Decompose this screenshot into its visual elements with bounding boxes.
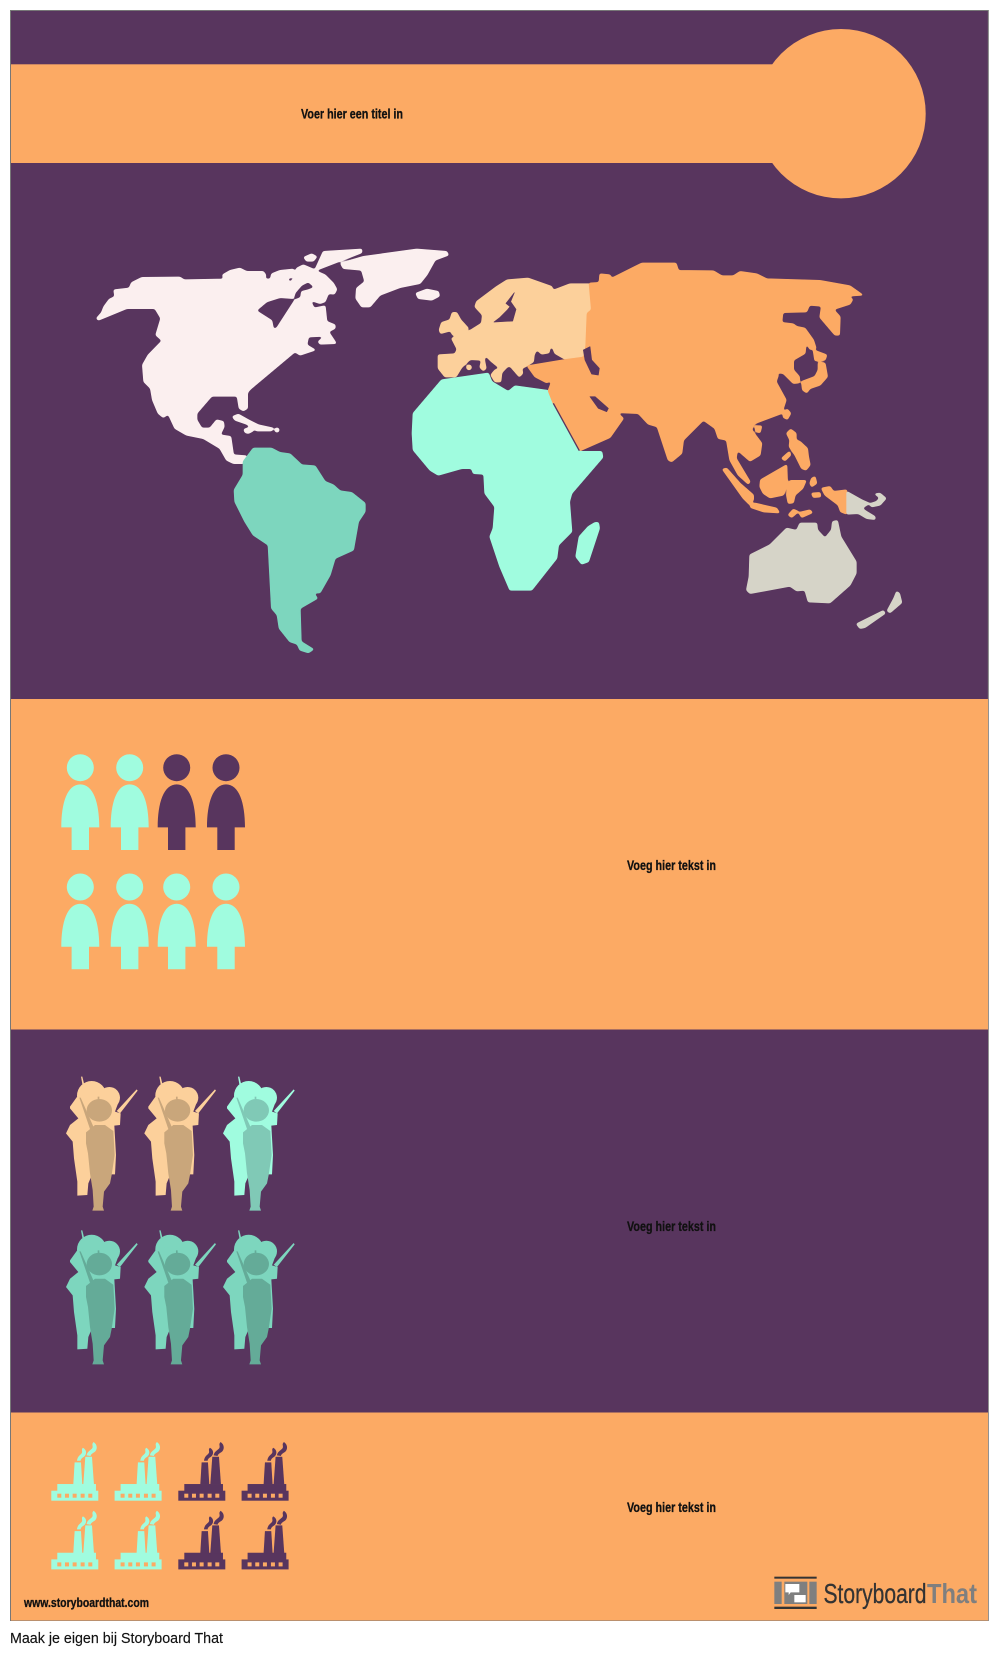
icon: soldiers mint [223,1077,295,1211]
icon: soldiers peach 2 [144,1077,216,1211]
region: South America [234,448,365,653]
inland seas [494,293,608,451]
icon row: people bottom [61,874,245,969]
region: North America [97,249,448,463]
region: Africa [412,373,603,590]
panel: soldiers [11,1030,988,1412]
icon: soldiers green 1 [66,1230,138,1364]
icon: soldiers peach 1 [66,1077,138,1211]
icon: soldiers green 3 [223,1230,295,1364]
region: Oceania [747,492,902,628]
panel: factories [11,1412,988,1620]
footer caption: Maak je eigen bij Storyboard That [10,1631,223,1647]
region: Europe [438,278,593,382]
text block: people: Voeg hier tekst in [627,858,716,873]
title: Voer hier een titel in [301,106,403,121]
world map [97,249,902,653]
icon row: people top [61,754,245,850]
website link: www.storyboardthat.com [23,1596,149,1610]
icon: soldiers green 2 [144,1230,216,1364]
logo: Storyboard That: Storyboard [824,1578,926,1609]
text block: factories: Voeg hier tekst in [627,1500,716,1515]
text block: soldiers: Voeg hier tekst in [627,1219,716,1234]
region: Asia [527,263,863,517]
icon row: factories bottom [51,1511,289,1569]
icon row: factories top [51,1442,289,1501]
logo: Storyboard That [774,1577,977,1609]
title banner [11,29,926,198]
logo: Storyboard That: That [927,1578,977,1609]
panel: people [11,699,988,1030]
